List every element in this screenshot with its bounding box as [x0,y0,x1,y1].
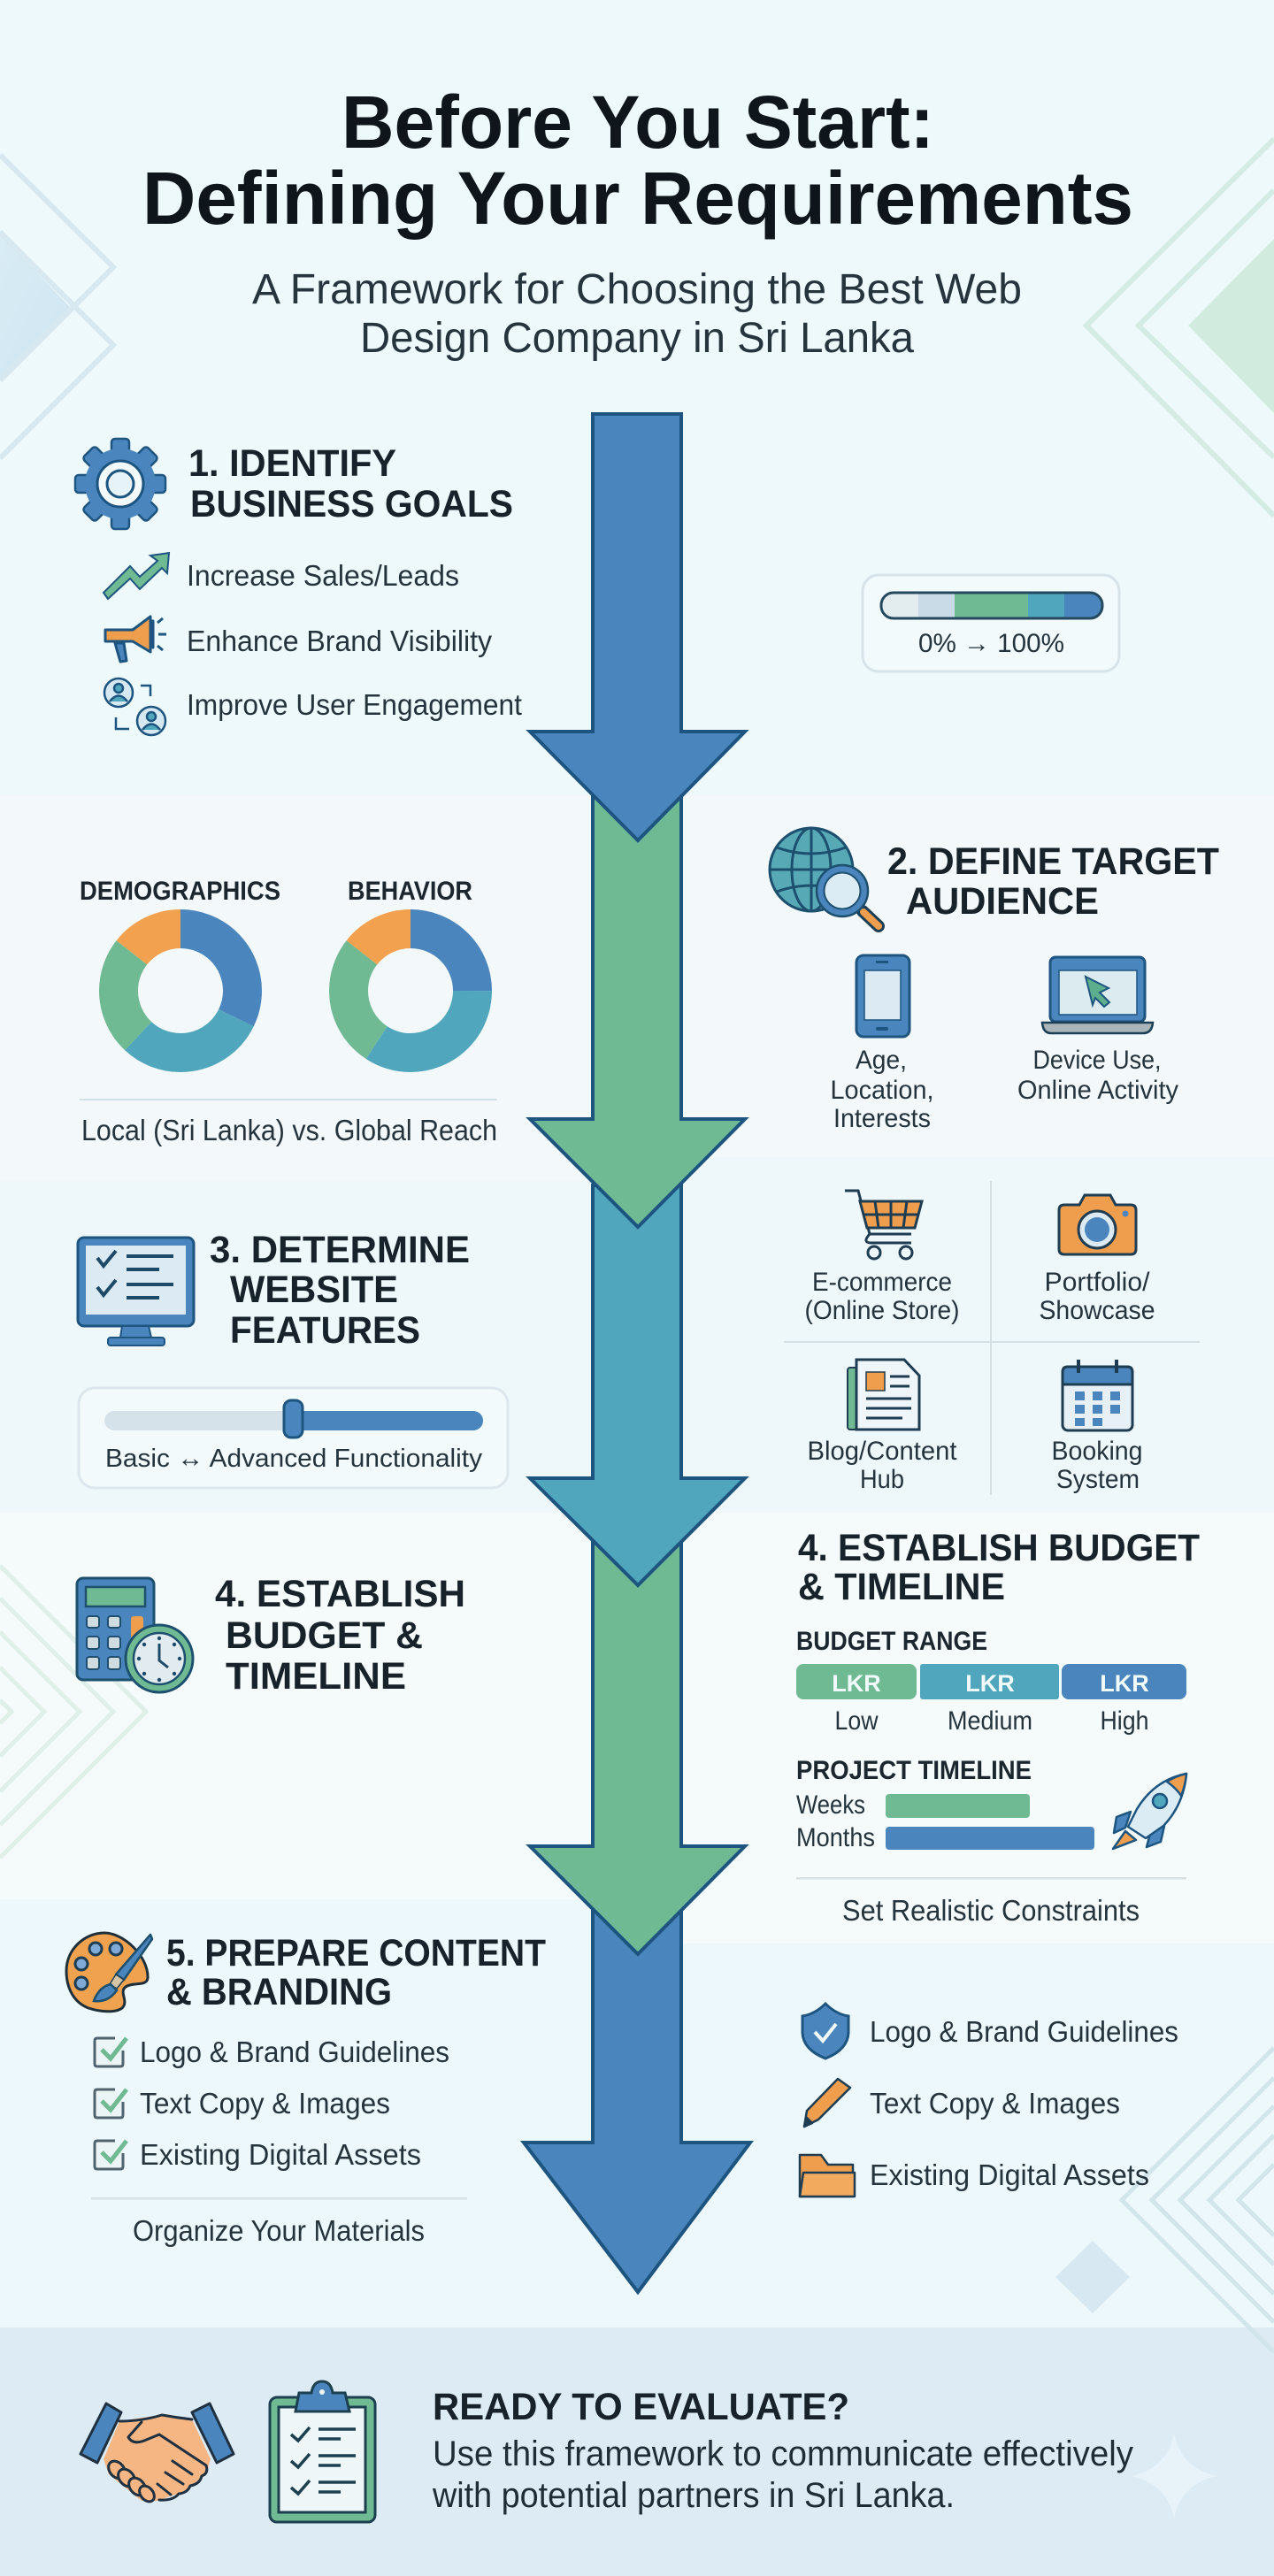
text: e-commerce [805,1268,959,1325]
text: age location interests: Age, [856,1046,907,1075]
background chevrons section 4 [0,1566,146,1858]
subtitle [252,266,1022,362]
background chevrons section 5 [1122,2048,1274,2352]
text: portfolio: Showcase [1039,1296,1155,1325]
heading: step 4 right: & TIMELINE [798,1566,1005,1608]
heading: step 3 [210,1229,470,1352]
panel: progress card [863,575,1119,671]
icon: camera [1059,1195,1136,1254]
heading: step 1: 1. IDENTIFY [188,442,396,485]
panel: footer content [81,2381,1133,2522]
heading: step 4 right: 4. ESTABLISH BUDGET [798,1527,1200,1569]
heading: step 4 right [798,1527,1200,1608]
footer band [0,2327,1274,2576]
panel: step 5 left [66,1932,546,2247]
icon: clipboard [270,2381,375,2522]
background chevrons left [0,155,113,458]
slider [104,1400,483,1438]
budget labels: High [1101,1706,1148,1736]
text: device use: Online Activity [1017,1076,1178,1105]
arrow 5 [524,1902,750,2292]
timeline: weeks: Weeks [796,1790,865,1820]
text: call to action: Use this framework to communicate effectively [433,2434,1133,2473]
text: booking [1051,1437,1143,1494]
budget bars: LKR [832,1670,881,1697]
text: call to action [432,2434,1133,2515]
text: age location interests [830,1046,934,1133]
title [142,80,1133,240]
label: project timeline: PROJECT TIMELINE [796,1756,1032,1785]
heading: ready to evaluate: READY TO EVALUATE? [433,2386,849,2428]
heading: step 5: & BRANDING [166,1971,392,2013]
caption: reach: Local (Sri Lanka) vs. Global Reach [81,1114,497,1146]
checklist item 3: Existing Digital Assets [140,2138,421,2171]
label: behavior: BEHAVIOR [348,877,472,906]
panel: feature grid [784,1181,1200,1495]
heading: step 5 [166,1932,546,2013]
text: portfolio [1039,1268,1155,1325]
decorative diamond [1055,2241,1130,2313]
heading: step 4 left: BUDGET & [226,1614,423,1657]
icon: growth arrow [104,553,169,599]
panel: demographics charts [80,877,497,1146]
icon: rocket [1113,1774,1186,1849]
icon: calculator and clock [77,1578,193,1692]
text: age location interests: Location, [830,1076,934,1105]
text: logo guidelines: Logo & Brand Guidelines [870,2015,1178,2048]
text: digital assets: Existing Digital Assets [870,2158,1149,2191]
icon: shield [802,2004,848,2058]
text: blog [807,1437,957,1494]
checklist item 2: Text Copy & Images [140,2087,390,2120]
heading: step 5: 5. PREPARE CONTENT [166,1932,546,1974]
text: device use: Device Use, [1033,1046,1161,1075]
caption: constraints: Set Realistic Constraints [842,1894,1140,1927]
budget bars [796,1664,1186,1699]
heading: step 2: AUDIENCE [906,880,1099,923]
heading: step 3: 3. DETERMINE [210,1229,470,1271]
text: text copy: Text Copy & Images [870,2087,1120,2120]
icon: globe with magnifier [770,828,879,926]
caption: organize: Organize Your Materials [133,2214,425,2247]
heading: step 3: FEATURES [230,1309,420,1352]
icon: shopping cart [845,1191,922,1259]
panel: step 3 website features [78,1229,508,1488]
heading: step 2 [887,840,1219,923]
heading: step 4 left: TIMELINE [226,1655,406,1698]
text: portfolio: Portfolio/ [1044,1268,1150,1297]
icon: palette [66,1933,152,2012]
arrow 4 [530,1539,745,1954]
icon: laptop [1042,957,1153,1033]
heading: step 3: WEBSITE [230,1269,398,1311]
decorative sparkle [1132,2434,1216,2518]
panel: step 5 right [800,2004,1178,2196]
slider label: Basic ↔ Advanced Functionality [105,1445,483,1473]
arrow 3 [530,1185,745,1585]
icon: phone [856,955,909,1037]
donut chart: demographics [119,929,242,1053]
title: Before You Start: [342,80,934,164]
progress bar [881,593,1102,618]
text: age location interests: Interests [833,1104,931,1133]
panel: step 2 target audience [770,828,1219,1133]
text: e-commerce: (Online Store) [805,1296,959,1325]
text: increase sales: Increase Sales/Leads [187,559,459,592]
text: booking: System [1056,1465,1140,1494]
heading: step 2: 2. DEFINE TARGET [887,840,1219,883]
icon: gear [75,439,165,529]
panel: step 1 identify goals [75,439,522,735]
text: device use [1017,1046,1178,1105]
text: e-commerce: E-commerce [812,1268,952,1297]
timeline: weeks [796,1790,1030,1820]
arrow 2 [530,796,745,1227]
background chevrons right [1086,139,1274,516]
icon: users [104,678,165,735]
icon: folder [800,2155,855,2196]
icon: handshake [81,2404,234,2504]
text: blog: Hub [860,1465,904,1494]
budget labels: Low [835,1706,879,1736]
slider card [79,1388,508,1488]
label: budget range: BUDGET RANGE [796,1627,987,1656]
text: user engagement: Improve User Engagement [187,688,522,721]
arrow 1 [530,414,745,840]
icon: calendar [1063,1360,1132,1430]
subtitle: A Framework for Choosing the Best Web [252,266,1022,313]
timeline: months [796,1823,1094,1852]
budget bars: LKR [1100,1670,1149,1697]
timeline: months: Months [796,1823,875,1852]
checklist item 1: Logo & Brand Guidelines [140,2036,449,2068]
icon: pencil [804,2079,850,2127]
budget labels: Medium [948,1706,1032,1736]
heading: step 1: BUSINESS GOALS [190,483,513,525]
budget labels [835,1706,1148,1736]
title: Defining Your Requirements [142,157,1133,240]
text: blog: Blog/Content [807,1437,957,1466]
text: call to action: with potential partners in Sri Lanka. [432,2476,955,2515]
panel: step 4 right budget [796,1527,1200,1927]
budget bars: LKR [965,1670,1015,1697]
donut chart: behavior [349,929,472,1053]
heading: step 1 [188,442,513,525]
icon: megaphone [105,617,166,662]
progress label: 0% → 100% [918,629,1064,658]
panel: step 4 left [77,1573,465,1698]
label: demographics: DEMOGRAPHICS [80,877,280,906]
icon: monitor checklist [78,1238,194,1346]
heading: step 4 left: 4. ESTABLISH [215,1573,465,1615]
icon: document [848,1360,919,1430]
heading: step 4 left [215,1573,465,1698]
text: brand visibility: Enhance Brand Visibility [187,625,492,657]
subtitle: Design Company in Sri Lanka [360,315,914,362]
text: booking: Booking [1051,1437,1143,1466]
